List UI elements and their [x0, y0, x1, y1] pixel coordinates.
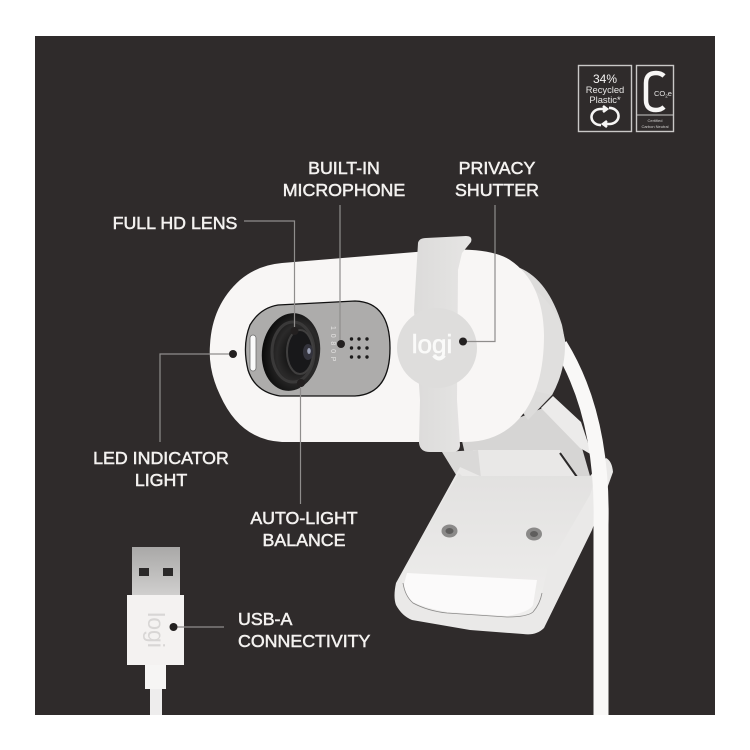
callout: auto-light balance — [250, 379, 358, 550]
badge: 34% recycled plastic: Recycled — [586, 84, 624, 95]
callout: LED indicator light — [93, 350, 237, 490]
logi logo: logi — [412, 329, 452, 359]
badges: sustainability — [578, 66, 674, 132]
LED light — [250, 335, 256, 371]
white foot pad — [404, 573, 537, 616]
badge: 34% recycled plastic — [578, 66, 632, 132]
foot screws — [442, 524, 542, 540]
badge: certified carbon neutral: e — [668, 89, 672, 98]
callout: auto-light balance: AUTO-LIGHT — [250, 508, 358, 528]
1080P marking: 1080P — [329, 326, 336, 365]
callout: full HD lens — [113, 213, 298, 335]
callout: privacy shutter — [455, 158, 539, 346]
webcam body — [210, 249, 544, 442]
callout: LED indicator light: LED INDICATOR — [93, 448, 229, 468]
callout: privacy shutter: PRIVACY — [459, 158, 536, 178]
callout: USB-A connectivity — [170, 609, 371, 651]
badge: certified carbon neutral: 2 — [665, 94, 668, 98]
badge: certified carbon neutral: Carbon Neutral — [641, 124, 669, 129]
microphone holes — [350, 337, 369, 359]
camera lens — [257, 309, 325, 395]
USB-A connector — [127, 547, 184, 715]
badge: certified carbon neutral — [636, 66, 674, 132]
callout: USB-A connectivity: CONNECTIVITY — [238, 631, 371, 651]
privacy shutter strap — [397, 236, 477, 452]
callout: built-in microphone — [283, 158, 405, 348]
callout: auto-light balance: BALANCE — [262, 530, 346, 550]
badge: certified carbon neutral: CO — [654, 89, 665, 98]
badge: 34% recycled plastic: Plastic* — [589, 94, 621, 105]
badge: certified carbon neutral: Certified — [648, 118, 662, 123]
callout: USB-A connectivity: USB-A — [238, 609, 292, 629]
callout: full HD lens: FULL HD LENS — [113, 213, 238, 233]
callout: privacy shutter: SHUTTER — [455, 180, 539, 200]
rear housing edge over cable — [530, 290, 565, 395]
USB logi mark: logi — [143, 612, 169, 648]
callout: built-in microphone: BUILT-IN — [308, 158, 380, 178]
cable — [560, 345, 601, 715]
webcam foot clip — [394, 458, 613, 634]
badge: 34% recycled plastic: 34% — [593, 72, 617, 86]
webcam rear housing — [500, 268, 564, 420]
callout: built-in microphone: MICROPHONE — [283, 180, 405, 200]
lens module — [245, 301, 390, 396]
webcam stand arm — [442, 396, 592, 478]
callout: LED indicator light: LIGHT — [135, 470, 187, 490]
